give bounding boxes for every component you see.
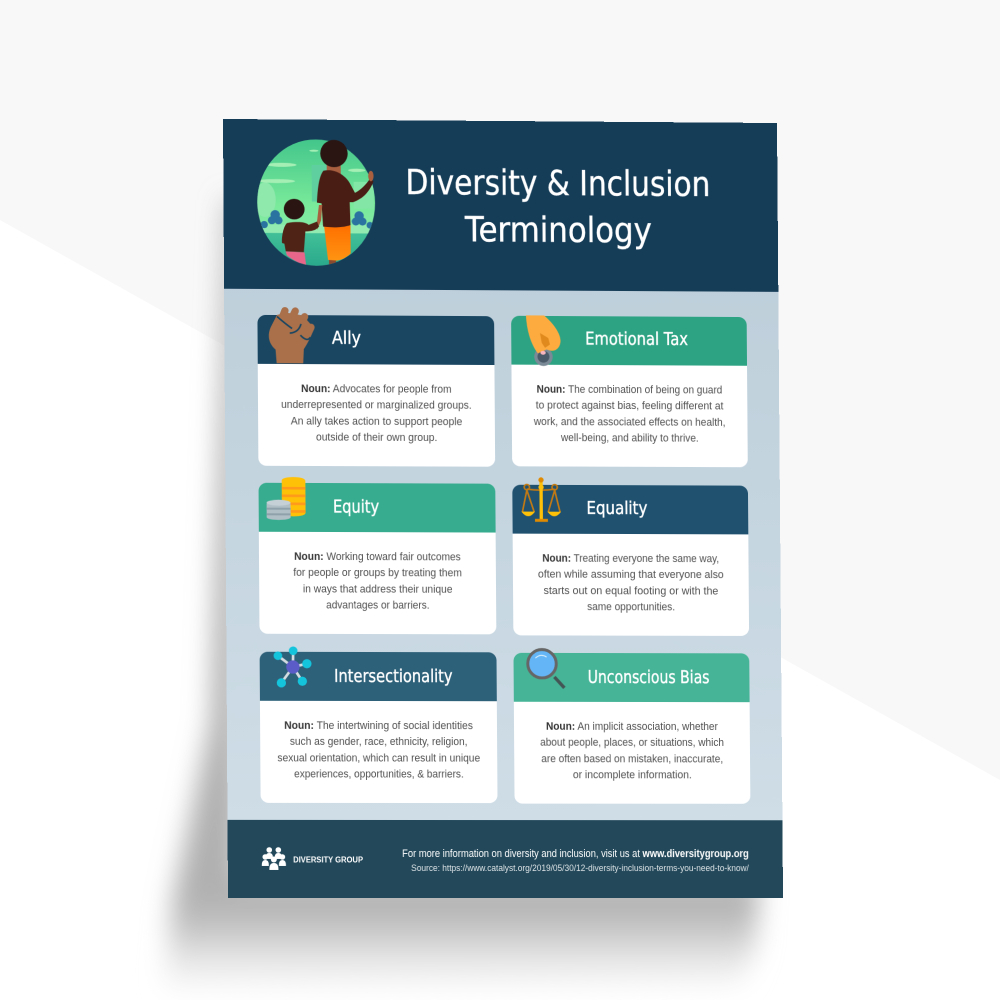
definition text: sexual orientation, which can result in unique [277,751,481,765]
definition text: Noun: The intertwining of social identities [284,719,474,733]
definition text: or incomplete information. [574,771,694,784]
definition text: Noun: Treating everyone the same way, [543,554,722,567]
icon: network nodes [273,646,312,688]
definition text: Noun: Working toward fair outcomes [294,551,462,564]
definition text: outside of their own group. [316,432,438,445]
definition text: such as gender, race, ethnicity, religion, [290,735,468,749]
panel: Unconscious Bias [513,649,750,804]
panel: Emotional Tax [511,315,748,467]
panel: Intersectionality [260,646,498,803]
definition text [281,383,472,444]
heading: Emotional Tax [587,330,691,351]
definition text [277,720,480,781]
definition text: advantages or barriers. [326,599,430,612]
source line: Source: https://www.catalyst.org/2019/05/30/12-diversity-inclusion-terms-you-need-to-know/ [411,863,752,876]
poster body background [223,119,783,898]
definition text: about people, places, or situations, which [541,738,726,751]
heading: Ally [332,328,362,349]
definition text: Noun: The combination of being on guard [538,385,725,398]
heading: Intersectionality [334,666,453,688]
heading: Unconscious Bias [589,668,712,690]
definition text [540,721,724,781]
definition text: for people or groups by treating them [293,567,462,580]
definition text: in ways that address their unique [303,583,453,596]
title [405,162,711,252]
icon: raised fist [269,311,315,363]
footer information line: For more information on diversity and inclusion, visit us at www.diversitygroup.org [402,848,751,863]
definition text: to protect against bias, feeling different at [537,401,726,414]
definition text: are often based on mistaken, inaccurate, [542,754,725,768]
icon: balance scale [521,477,561,522]
title: Diversity & Inclusion [406,163,714,206]
definition text: well-being, and ability to thrive. [561,433,701,446]
icon: magnifying glass [528,649,564,688]
logo text: DIVERSITY GROUP [293,853,363,864]
definition text: Noun: An implicit association, whether [547,722,720,735]
definition text: underrepresented or marginalized groups. [281,399,472,413]
panel: Ally [257,311,495,467]
title: Terminology [465,210,654,252]
icon: stacked coins [266,477,306,520]
definition text: same opportunities. [588,603,677,615]
poster [223,119,783,898]
definition text [533,384,726,445]
icon: group of people logo [262,847,286,870]
heading: Equity [333,497,380,518]
icon: hand holding coin [526,315,561,366]
definition text [293,551,462,612]
panel: Equity [258,477,496,634]
definition text: An ally takes action to support people [291,415,463,429]
definition text: often while assuming that everyone also [539,570,726,583]
definition text [538,553,724,614]
definition text: Noun: Advocates for people from [301,383,452,396]
definition text: work, and the associated effects on health, [534,417,728,430]
footer band [227,820,783,898]
definition text: experiences, opportunities, & barriers. [294,768,464,781]
illustration: adult and child in park [253,136,381,267]
heading: Equality [588,499,650,521]
header band [223,119,778,292]
definition text: starts out on equal footing or with the [545,586,721,599]
panel: Equality [512,477,749,636]
